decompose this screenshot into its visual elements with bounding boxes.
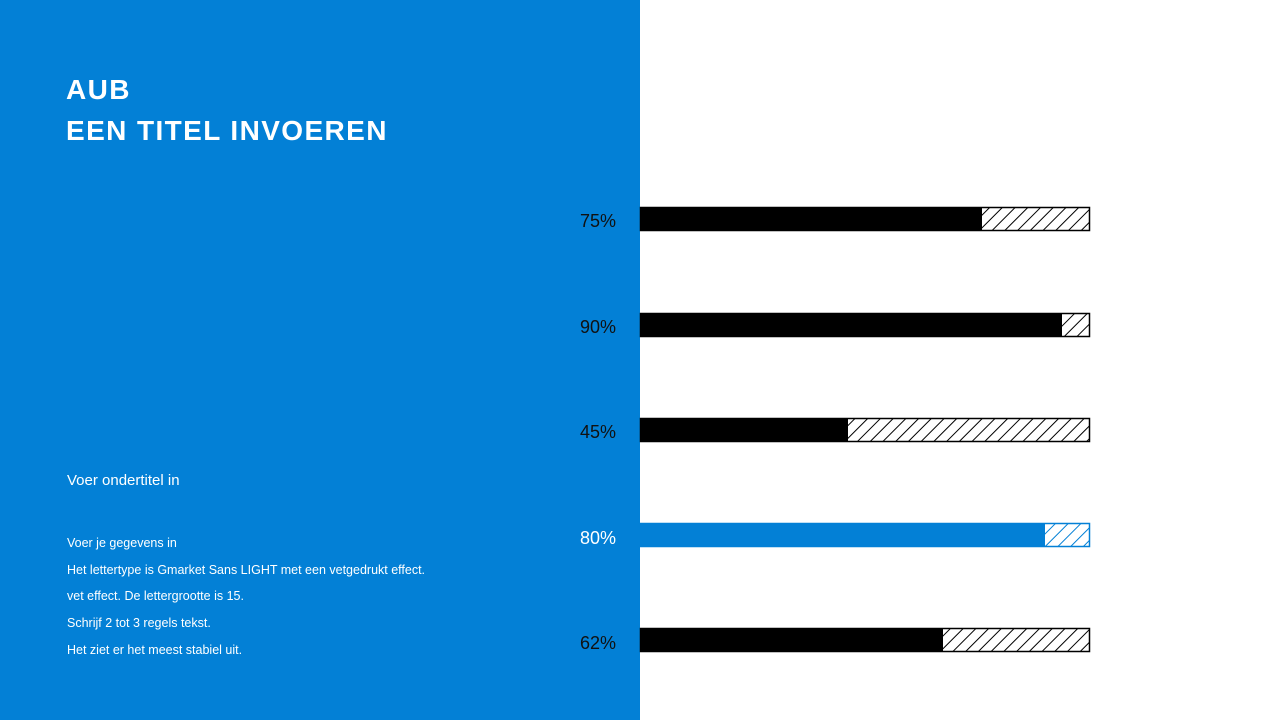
text block: Het lettertype is Gmarket Sans LIGHT met een vetgedrukt effect. xyxy=(67,563,425,577)
title: AUB xyxy=(66,74,131,105)
bar: 80% xyxy=(600,523,1090,547)
label 80%: 80% xyxy=(580,528,616,548)
bar: 90% xyxy=(640,313,1090,337)
bar: 62% xyxy=(640,628,1090,652)
title xyxy=(66,74,388,146)
title: EEN TITEL INVOEREN xyxy=(66,115,388,146)
text block: Voer je gegevens in xyxy=(67,536,177,550)
text block: vet effect. De lettergrootte is 15. xyxy=(67,589,244,603)
label 62%: 62% xyxy=(580,633,616,653)
label 45%: 45% xyxy=(580,422,616,442)
panel: blue left background xyxy=(0,0,640,720)
bar: 45% xyxy=(640,418,1090,442)
label 90%: 90% xyxy=(580,317,616,337)
label 75%: 75% xyxy=(580,211,616,231)
text block: Schrijf 2 tot 3 regels tekst. xyxy=(67,616,211,630)
text block: Het ziet er het meest stabiel uit. xyxy=(67,643,242,657)
text block xyxy=(67,536,425,657)
subtitle: Voer ondertitel in xyxy=(67,472,180,489)
bar: 75% xyxy=(640,207,1090,231)
